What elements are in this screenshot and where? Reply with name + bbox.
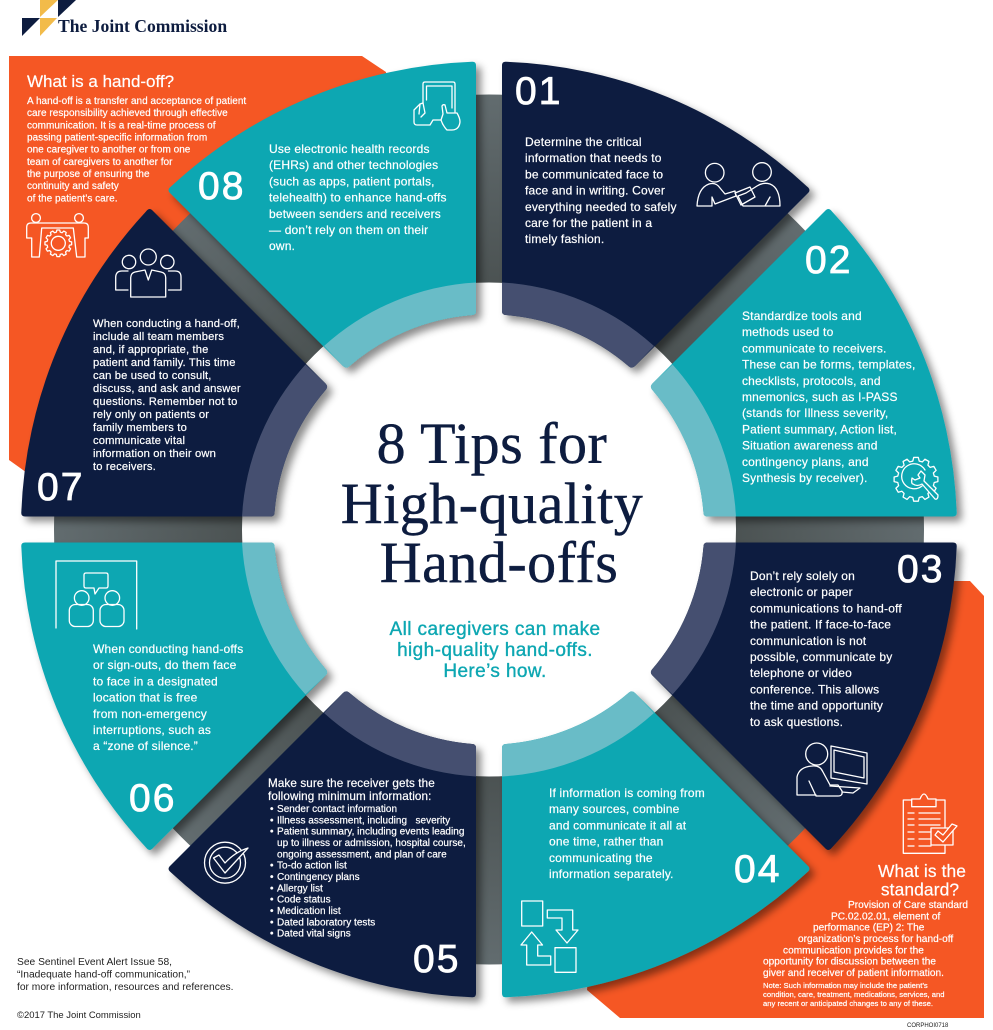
icon: hands on tablet: [414, 82, 460, 130]
title: [341, 411, 643, 595]
panel: tip 06: 06: [129, 777, 176, 820]
panel: what is a hand-off text: of the patient’s care.: [27, 193, 118, 204]
subtitle: Here’s how.: [443, 661, 547, 682]
panel: tip 08: between senders and receivers: [269, 207, 441, 221]
panel: tip 07: discuss, and ask and answer: [93, 383, 241, 395]
source note: for more information, resources and references.: [17, 982, 234, 993]
panel: tip 01: 01: [515, 70, 562, 113]
bullet list: Allergy list: [277, 883, 323, 894]
segment 08 shape: [169, 62, 476, 368]
bullet list: Illness assessment, including severity: [277, 815, 450, 826]
panel: tip 05: 05: [413, 938, 460, 981]
panel: tip 03: telephone or video: [750, 666, 852, 680]
panel: tip 03: possible, communicate by: [750, 650, 892, 664]
panel: tip 06: a “zone of silence.”: [93, 739, 198, 753]
bullet list: Medication list: [277, 906, 341, 917]
bullet list: •: [270, 815, 274, 826]
panel: tip 01: be communicated face to: [525, 167, 663, 181]
title: 8 Tips for: [377, 411, 607, 476]
panel: tip 01: care for the patient in a: [525, 216, 652, 230]
panel: tip 04: and communicate it all at: [549, 818, 687, 832]
panel: tip 03: 03: [897, 548, 944, 591]
panel: tip 02: checklists, protocols, and: [742, 374, 881, 388]
panel: what is the standard: condition, care, treatment, medications, services, and: [763, 990, 945, 999]
subtitle: high-quality hand-offs.: [397, 640, 593, 661]
panel: tip 01: face and in writing. Cover: [525, 184, 665, 198]
panel: tip 02: Patient summary, Action list,: [742, 422, 897, 436]
panel: what is a hand-off text: care responsibility achieved through effective: [27, 108, 228, 119]
segment 04 shape: [502, 691, 809, 997]
panel: tip 02: Situation awareness and: [742, 439, 878, 453]
bullet list: •: [270, 827, 274, 838]
panel: tip 04: one time, rather than: [549, 835, 664, 849]
panel: tip 04: communicating the: [549, 851, 653, 865]
logo: The Joint Commission: The Joint Commission: [58, 16, 227, 36]
panel: tip 08: (such as apps, patient portals,: [269, 174, 435, 188]
copyright: ©2017 The Joint Commission: [17, 1010, 141, 1021]
bullet list: •: [270, 895, 274, 906]
bullet list: up to illness or admission, hospital course,: [277, 838, 466, 849]
panel: tip 08: — don’t rely on them on their: [269, 223, 428, 237]
panel: tip 02: [0, 0, 938, 501]
panel: tip 03: the time and opportunity: [750, 699, 883, 713]
panel: tip 07: questions. Remember not to: [93, 396, 237, 408]
source note: See Sentinel Event Alert Issue 58,: [17, 957, 172, 968]
panel: tip 06: interruptions, such as: [93, 723, 211, 737]
panel: tip 07: rely only on patients or: [93, 409, 209, 421]
title: Hand-offs: [380, 530, 618, 595]
panel: tip 06: When conducting hand-offs: [93, 642, 243, 656]
panel: orange what is a hand-off background: [9, 56, 400, 480]
icon: check in circle: [204, 842, 248, 883]
panel: what is a hand-off text: passing patient-specific information from: [27, 132, 207, 144]
panel: what is a hand-off text: What is a hand-off?: [27, 72, 174, 91]
panel: tip 07: [0, 0, 244, 509]
bullet list: Code status: [277, 895, 331, 906]
panel: tip 07: information on their own: [93, 448, 216, 460]
panel: what is a hand-off text: one caregiver to another or from one: [27, 145, 191, 156]
panel: tip 06: location that is free: [93, 691, 198, 705]
icon: clipboard with check: [903, 794, 957, 853]
bullet list: To-do action list: [277, 861, 347, 872]
panel: tip 07: and, if appropriate, the: [93, 344, 209, 356]
panel: tip 04: [0, 0, 781, 972]
panel: what is a hand-off text: continuity and safety: [27, 181, 119, 192]
panel: tip 03: to ask questions.: [750, 715, 843, 729]
bullet list: Dated vital signs: [277, 929, 351, 940]
panel: tip 02: These can be forms, templates,: [742, 358, 915, 372]
panel: tip 01: Determine the critical: [525, 135, 642, 149]
bullet list: •: [270, 906, 274, 917]
panel: tip 01: [0, 0, 780, 246]
icon: squares and arrows: [521, 901, 578, 972]
panel: what is a hand-off text: A hand-off is a transfer and acceptance of patient: [27, 96, 246, 107]
subtitle: [390, 619, 600, 682]
segment 03 shape: [651, 542, 957, 850]
bullet list: ongoing assessment, and plan of care: [277, 849, 447, 860]
icon: group of three people: [116, 249, 181, 297]
panel: tip 04: 04: [734, 848, 781, 891]
segment 01 shape: [502, 62, 809, 368]
panel: what is the standard: PC.02.02.01, element of: [831, 911, 940, 922]
panel: tip 07: When conducting a hand-off,: [93, 318, 240, 330]
panel: tip 07: patient and family. This time: [93, 357, 236, 369]
source note: “Inadequate hand-off communication,”: [17, 970, 191, 980]
panel: tip 01: timely fashion.: [525, 232, 604, 246]
panel: tip 08: own.: [269, 239, 295, 253]
panel: tip 05: following minimum information:: [268, 790, 431, 803]
subtitle: All caregivers can make: [390, 619, 600, 640]
icon: people around gear: [27, 214, 88, 257]
document code: CORPHOI0718: [907, 1023, 949, 1029]
gray connector ring: [148, 188, 830, 870]
panel: tip 08: telehealth) to enhance hand-offs: [269, 191, 447, 205]
panel: tip 04: many sources, combine: [549, 802, 680, 816]
panel: what is a hand-off text: the purpose of ensuring the: [27, 169, 150, 180]
bullet list: •: [270, 929, 274, 940]
segment 06 shape: [21, 542, 327, 850]
panel: tip 01: everything needed to safely: [525, 200, 677, 214]
bullet list: •: [270, 872, 274, 883]
panel: tip 02: contingency plans, and: [742, 455, 869, 469]
panel: tip 03: the patient. If face-to-face: [750, 618, 891, 632]
panel: tip 03: communication is not: [750, 634, 867, 648]
panel: what is the standard: giver and receiver of patient information.: [763, 968, 944, 979]
panel: tip 02: mnemonics, such as I-PASS: [742, 390, 898, 404]
bullet list: •: [270, 883, 274, 894]
panel: what is the standard: communication provides for the: [783, 945, 924, 956]
panel: tip 01: information that needs to: [525, 151, 662, 165]
panel: tip 06: to face in a designated: [93, 674, 218, 688]
icon: gear and wrench: [894, 457, 938, 501]
panel: tip 03: communications to hand-off: [750, 601, 902, 615]
segment 07 shape: [21, 209, 327, 516]
bullet list: Contingency plans: [277, 872, 360, 883]
bullet list: •: [270, 917, 274, 928]
panel: tip 02: Standardize tools and: [742, 309, 862, 323]
panel: tip 03: electronic or paper: [750, 585, 853, 599]
panel: tip 02: (stands for Illness severity,: [742, 406, 888, 420]
panel: tip 03: [0, 0, 944, 796]
panel: orange what is the standard background: [587, 581, 984, 1018]
panel: what is a hand-off text: communication. It is a real-time process of: [27, 120, 216, 131]
panel: what is the standard: organization’s process for hand-off: [798, 934, 953, 945]
panel: tip 03: Don’t rely solely on: [750, 569, 855, 583]
panel: tip 07: can be used to consult,: [93, 370, 212, 382]
panel: what is a hand-off text: [0, 0, 249, 204]
panel: tip 07: include all team members: [93, 331, 224, 343]
bullet list: Sender contact information: [277, 804, 397, 815]
panel: what is the standard: opportunity for discussion between the: [763, 957, 936, 968]
title: High-quality: [341, 471, 643, 536]
panel: tip 08: Use electronic health records: [269, 142, 430, 156]
panel: tip 08: [0, 0, 460, 253]
icon: person at computer: [797, 743, 867, 796]
panel: tip 03: conference. This allows: [750, 682, 879, 696]
panel: tip 06: or sign-outs, do them face: [93, 658, 237, 672]
bullet list: Patient summary, including events leading: [277, 827, 464, 838]
panel: what is the standard: standard?: [881, 880, 959, 900]
panel: tip 08: 08: [198, 165, 245, 208]
panel: what is the standard: any recent or anticipated changes to any of these.: [763, 999, 933, 1008]
panel: what is the standard: Provision of Care standard: [848, 900, 968, 911]
panel: what is a hand-off text: team of caregivers to another for: [27, 157, 173, 168]
panel: tip 02: 02: [805, 239, 852, 282]
panel: what is the standard: What is the: [878, 861, 966, 881]
panel: tip 04: information separately.: [549, 867, 674, 881]
icon: two people exchanging document: [697, 163, 780, 206]
panel: tip 07: communicate vital: [93, 435, 185, 447]
bullet list: •: [270, 804, 274, 815]
segment 02 shape: [651, 209, 957, 516]
bullet list: Dated laboratory tests: [277, 917, 375, 928]
panel: tip 02: communicate to receivers.: [742, 341, 887, 355]
panel: tip 05: Make sure the receiver gets the: [268, 777, 435, 790]
panel: tip 07: to receivers.: [93, 461, 156, 473]
panel: what is the standard: performance (EP) 2: The: [813, 923, 925, 934]
panel: tip 06: [0, 0, 247, 820]
panel: tip 05: [0, 0, 469, 981]
bullet list: •: [270, 861, 274, 872]
panel: tip 04: If information is coming from: [549, 786, 705, 800]
panel: tip 06: from non-emergency: [93, 707, 207, 721]
segment 05 shape: [169, 691, 476, 997]
logo: The Joint Commission: [22, 0, 227, 36]
panel: what is the standard: Note: Such information may include the patient’s: [763, 981, 928, 990]
panel: tip 08: (EHRs) and other technologies: [269, 158, 438, 172]
panel: tip 02: methods used to: [742, 325, 834, 339]
panel: tip 02: Synthesis by receiver).: [742, 471, 868, 485]
icon: two people talking in a room: [56, 561, 137, 629]
panel: tip 07: family members to: [93, 422, 187, 434]
panel: tip 07: 07: [37, 466, 84, 509]
